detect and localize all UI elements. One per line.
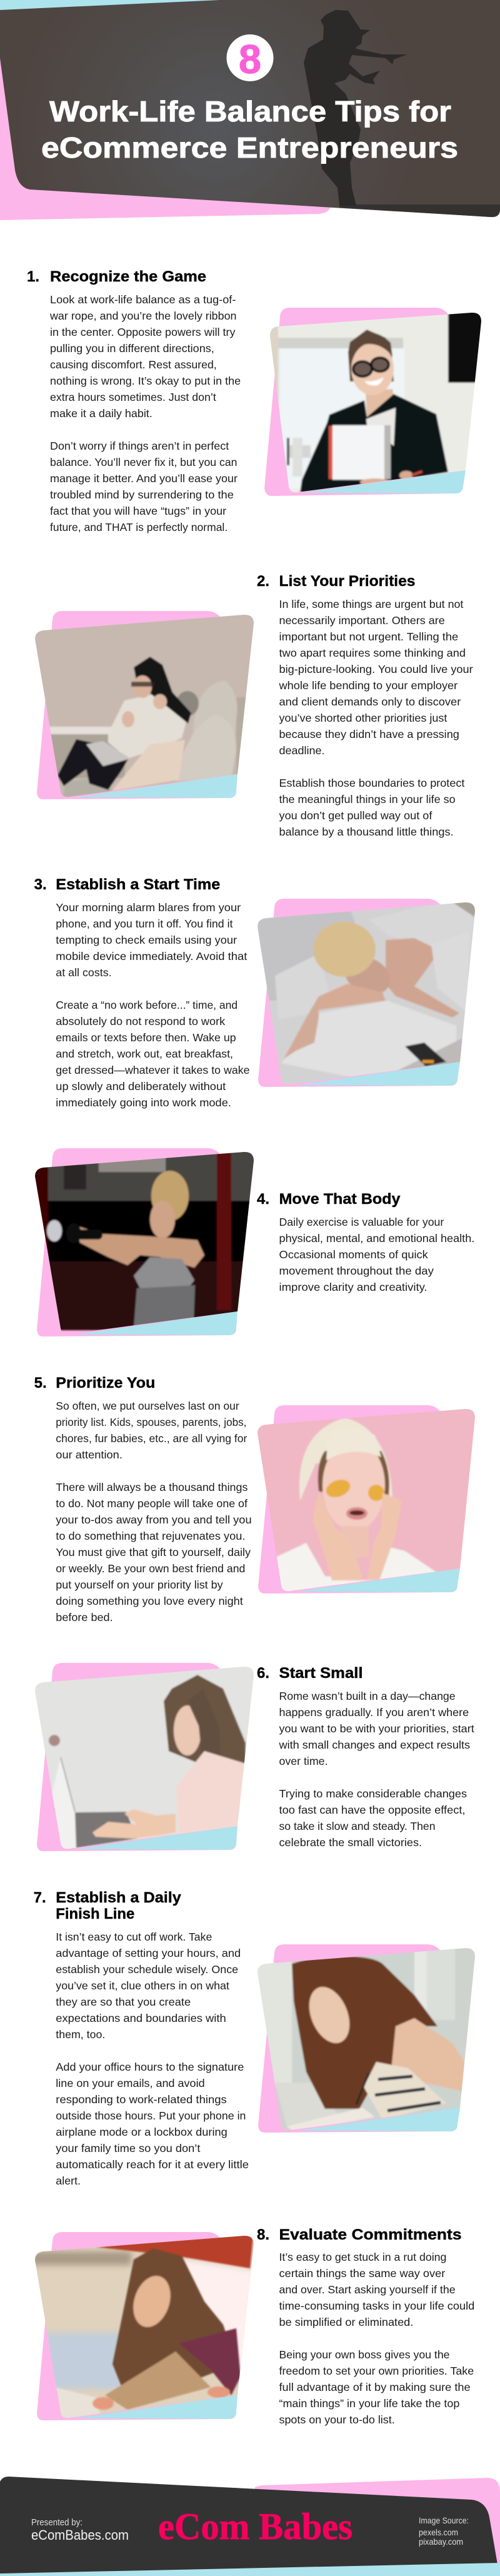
body text: tip 8: freedom to set your own priorities. Take [279, 2365, 474, 2377]
body text: tip 2 [278, 598, 473, 838]
photo: smiling woman reading folder [31, 2230, 256, 2420]
body text: tip 1: in the center. Opposite powers will try [50, 326, 236, 338]
body text: tip 7: your family time so you don’t [56, 2142, 201, 2154]
body text: tip 7: airplane mode or a lockbox during [56, 2126, 228, 2138]
body text: tip 4 [279, 1216, 474, 1293]
body text: tip 1: balance. You’ll never fix it, but you can [50, 456, 238, 468]
title: eCommerce Entrepreneurs [41, 131, 458, 164]
body text: tip 2: you don’t get pulled way out of [279, 809, 432, 822]
body text: tip 6: celebrate the small victories. [279, 1836, 422, 1849]
body text: tip 6: with small changes and expect results [278, 1739, 470, 1751]
body text: tip 3: mobile device immediately. Avoid that [56, 950, 248, 962]
body text: tip 5: So often, we put ourselves last on our [56, 1400, 239, 1412]
body text: tip 3: and stretch, work out, eat breakfast, [56, 1048, 233, 1060]
body text: tip 6: so take it slow and steady. Then [279, 1820, 435, 1832]
body text: tip 8: and over. Start asking yourself if the [279, 2283, 456, 2296]
image sources: pixabay.com [419, 2537, 463, 2547]
number badge [226, 34, 274, 82]
body text: tip 2: necessarily important. Others are [279, 614, 445, 627]
body text: tip 1: Look at work-life balance as a tug-of- [50, 293, 236, 306]
body text: tip 8: Being your own boss gives you the [279, 2348, 450, 2361]
body text: tip 2: two apart requires some thinking and [279, 647, 466, 659]
panel: tip 8 [31, 2226, 474, 2426]
body text: tip 6: over time. [279, 1755, 328, 1767]
body text: tip 6: Rome wasn’t built in a day—change [279, 1690, 456, 1702]
body text: tip 5: our attention. [56, 1448, 122, 1461]
photo: woman asleep in bed [253, 897, 478, 1091]
panel: tip 2 [31, 573, 473, 838]
body text: tip 2: whole life bending to your employer [278, 679, 458, 692]
body text: tip 7: they are so that you create [56, 1996, 191, 2008]
body text: tip 3: emails or texts before then. Wake up [56, 1031, 236, 1044]
heading: tip 1: 1. [27, 268, 39, 285]
photo: curly-haired woman writing [253, 1942, 478, 2133]
body text: tip 3 [56, 901, 250, 1109]
body text: tip 5: put yourself on your priority list by [56, 1578, 223, 1591]
body text: tip 2: big-picture-looking. You could live your [279, 663, 473, 675]
body text: tip 6: happens gradually. If you aren’t where [279, 1706, 469, 1719]
title [41, 95, 458, 164]
logo: eCom Babes: eCom Babes [158, 2506, 352, 2547]
body text: tip 4: improve clarity and creativity. [279, 1281, 428, 1293]
body text: tip 3: at all costs. [56, 966, 112, 979]
silhouette of leaping woman [304, 10, 408, 206]
body text: tip 5: priority list. Kids, spouses, parents, jobs, [56, 1416, 246, 1428]
body text: tip 3: Create a “no work before...” time, and [56, 999, 238, 1011]
body text: tip 4: Daily exercise is valuable for your [279, 1216, 444, 1228]
body text: tip 1: war rope, and you’re the lovely ribbon [49, 310, 236, 322]
body text: tip 2: important but not urgent. Telling the [279, 630, 458, 643]
body text: tip 1 [49, 293, 241, 533]
body text: tip 4: Occasional moments of quick [279, 1248, 428, 1261]
presented by: Presented by: [31, 2517, 82, 2528]
body text: tip 5: your to-dos away from you and tell you [56, 1513, 252, 1526]
heading: tip 7: Finish Line [56, 1906, 134, 1922]
body text: tip 1: troubled mind by surrendering to the [50, 488, 234, 501]
panel: tip 5 [34, 1375, 478, 1624]
body text: tip 2: because they didn’t have a pressing [279, 728, 459, 740]
body text: tip 6: Trying to make considerable changes [279, 1787, 467, 1800]
body text: tip 8: full advantage of it by making sure the [279, 2381, 471, 2393]
body text: tip 7: advantage of setting your hours, and [56, 1947, 241, 1959]
body text: tip 7: expectations and boundaries with [56, 2012, 226, 2024]
heading: tip 4: Move That Body [279, 1191, 401, 1208]
heading: tip 1: Recognize the Game [50, 268, 206, 285]
photo: woman on sofa [31, 610, 256, 801]
body text: tip 6 [278, 1690, 474, 1849]
body text: tip 7: It isn’t easy to cut off work. Take [56, 1931, 212, 1943]
heading: tip 7 [34, 1889, 181, 1922]
body text: tip 4: movement throughout the day [279, 1265, 434, 1277]
body text: tip 5: chores, fur babies, etc., are all vying for [56, 1432, 248, 1445]
panel: tip 4 [31, 1148, 474, 1336]
body text: tip 7: Add your office hours to the signature [56, 2061, 244, 2073]
body text: tip 6: too fast can have the opposite effect, [279, 1804, 465, 1816]
body text: tip 1: manage it better. And you’ll ease your [50, 472, 238, 485]
body text: tip 1: make it a daily habit. [50, 407, 152, 420]
body text: tip 8: certain things the same way over [279, 2267, 445, 2280]
heading: tip 7: Establish a Daily [56, 1889, 181, 1906]
presented by [31, 2517, 129, 2543]
panel: tip 1 [27, 268, 483, 533]
heading: tip 8: 8. [257, 2226, 269, 2243]
body text: tip 3: absolutely do not respond to work [56, 1015, 225, 1028]
presented by: eComBabes.com [31, 2527, 129, 2543]
body text: tip 7: alert. [56, 2174, 81, 2187]
body text: tip 8: spots on your to-do list. [279, 2413, 395, 2426]
body text: tip 2: Establish those boundaries to protect [279, 777, 465, 789]
body text: tip 7 [56, 1931, 249, 2187]
body text: tip 1: causing discomfort. Rest assured, [50, 358, 217, 371]
body text: tip 8 [279, 2251, 474, 2426]
body text: tip 7: automatically reach for it at every little [56, 2158, 249, 2171]
panel: tip 3 [34, 876, 478, 1109]
body text: tip 3: tempting to check emails using your [56, 934, 237, 946]
body text: tip 2: balance by a thousand little things. [279, 826, 454, 838]
body text: tip 7: establish your schedule wisely. Once [56, 1963, 238, 1976]
body text: tip 5: You must give that gift to yourself, daily [56, 1546, 251, 1558]
body text: tip 5: doing something you love every night [56, 1595, 243, 1607]
heading: tip 5: 5. [34, 1375, 47, 1392]
photo: woman with under-eye patches [253, 1404, 478, 1595]
body text: tip 1: fact that you will have “tugs” in your [50, 505, 226, 517]
body text: tip 3: up slowly and deliberately without [56, 1080, 226, 1093]
body text: tip 2: you’ve shorted other priorities just [279, 712, 448, 724]
body text: tip 1: extra hours sometimes. Just don’t [50, 391, 216, 403]
body text: tip 7: outside those hours. Put your phone in [56, 2109, 246, 2122]
image sources: Image Source: [419, 2515, 469, 2525]
heading: tip 3: Establish a Start Time [56, 876, 220, 893]
body text: tip 3: get dressed—whatever it takes to wake [56, 1064, 250, 1076]
body text: tip 1: nothing is wrong. It’s okay to put in the [50, 375, 241, 387]
body text: tip 3: phone, and you turn it off. You find it [56, 917, 233, 930]
photo: woman lifting kettlebell [31, 1148, 256, 1336]
body text: tip 7: them, too. [56, 2028, 105, 2041]
body text: tip 1: Don’t worry if things aren’t in perfect [50, 440, 229, 452]
number badge: 8 [239, 36, 261, 82]
panel: tip 6 [31, 1660, 474, 1851]
body text: tip 5: before bed. [56, 1611, 113, 1624]
body text: tip 5: to do. Not many people will take one of [56, 1497, 248, 1510]
body text: tip 4: physical, mental, and emotional health. [279, 1232, 474, 1245]
body text: tip 5: There will always be a thousand things [56, 1481, 248, 1493]
body text: tip 2: In life, some things are urgent but not [279, 598, 464, 610]
heading: tip 6: 6. [257, 1665, 269, 1682]
body text: tip 2: the meaningful things in your life so [279, 793, 456, 806]
body text: tip 7: you’ve set it, clue others in on what [56, 1979, 229, 1992]
heading: tip 5: Prioritize You [56, 1375, 155, 1392]
panel: tip 7 [34, 1889, 478, 2187]
body text: tip 5: or weekly. Be your own best friend and [56, 1562, 245, 1575]
body text: tip 2: deadline. [279, 744, 325, 757]
body text: tip 3: immediately going into work mode. [56, 1096, 231, 1109]
body text: tip 8: be simplified or eliminated. [279, 2316, 413, 2328]
body text: tip 3: Your morning alarm blares from your [56, 901, 241, 914]
heading: tip 2: 2. [257, 573, 269, 590]
body text: tip 6: you want to be with your priorities, start [279, 1722, 474, 1735]
image sources [419, 2515, 469, 2547]
heading: tip 4: 4. [257, 1191, 269, 1208]
heading: tip 2: List Your Priorities [279, 573, 415, 590]
body text: tip 8: time-consuming tasks in your life could [279, 2300, 474, 2312]
image sources: pexels.com [419, 2527, 458, 2537]
body text: tip 1: future, and THAT is perfectly normal. [50, 521, 228, 533]
body text: tip 5: to do something that rejuvenates you. [56, 1530, 245, 1542]
photo: businesswoman with binder [264, 306, 483, 497]
heading: tip 7: 7. [34, 1889, 46, 1906]
heading: tip 6: Start Small [279, 1665, 362, 1682]
footer [0, 2477, 500, 2576]
body text: tip 7: line on your emails, and avoid [56, 2077, 205, 2089]
body text: tip 1: pulling you in different directions, [50, 342, 214, 355]
heading: tip 3: 3. [34, 876, 47, 893]
body text: tip 8: It’s easy to get stuck in a rut doing [279, 2251, 446, 2263]
photo: woman typing on laptop [31, 1660, 256, 1851]
body text: tip 7: responding to work-related things [56, 2093, 227, 2106]
heading: tip 8: Evaluate Commitments [279, 2226, 461, 2243]
body text: tip 5 [56, 1400, 252, 1624]
body text: tip 2: and client demands only to discover [279, 695, 461, 708]
title: Work-Life Balance Tips for [49, 95, 451, 128]
body text: tip 8: “main things” in your life take the top [279, 2397, 459, 2410]
header banner [0, 0, 500, 220]
